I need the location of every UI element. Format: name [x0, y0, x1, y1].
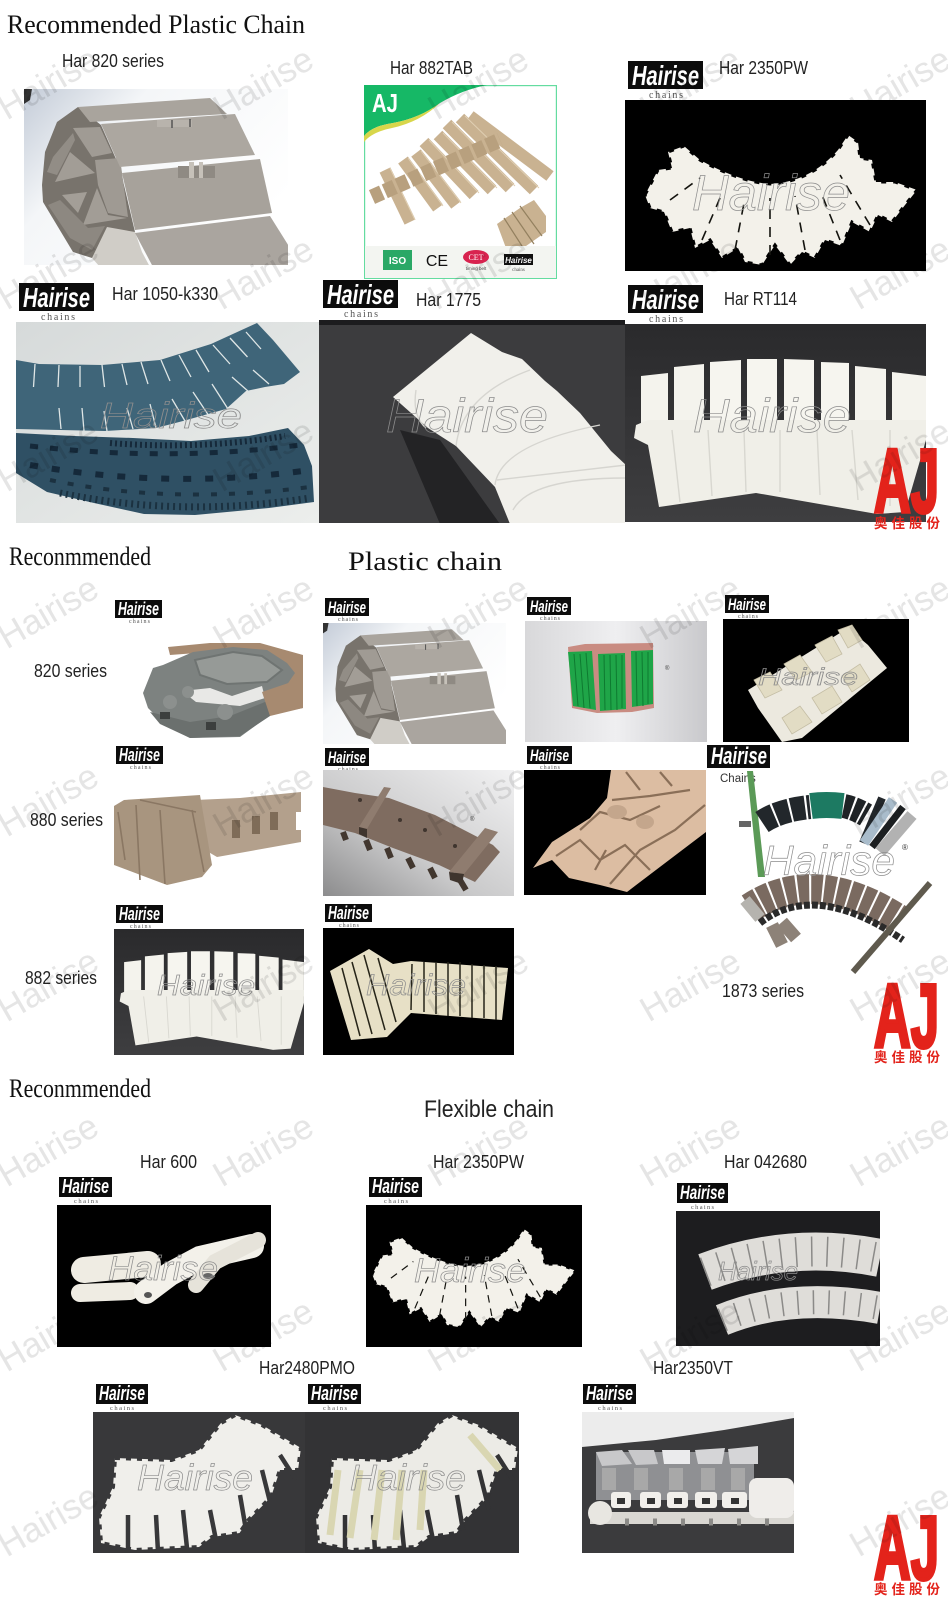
photo: 820 series plates	[323, 623, 506, 744]
product label: Har 1775: Har 1775	[416, 290, 481, 310]
photo: 1873 series chains	[739, 771, 930, 972]
logo: Hairise: chains	[649, 90, 683, 101]
photo: 882 series white chain: Hairise	[157, 970, 255, 1002]
logo: Hairise	[325, 748, 369, 773]
logo: AJ company mark: 奥佳股份	[874, 512, 940, 532]
photo: 880 series chain	[114, 792, 301, 885]
logo: Hairise	[677, 1183, 728, 1211]
photo: Har 042680: Hairise	[718, 1256, 798, 1286]
logo: Hairise: Hairise	[530, 746, 569, 765]
photo: Har RT114: Hairise	[693, 389, 851, 442]
product label: Har 820 series: Har 820 series	[62, 51, 164, 71]
logo: Hairise: chains	[41, 312, 75, 323]
logo: Hairise: chains	[323, 1405, 347, 1412]
background watermark pattern: Hairise	[206, 39, 320, 128]
logo: Hairise: Hairise	[328, 903, 369, 923]
background watermark pattern: Hairise	[633, 941, 747, 1030]
row label: 882 series: 882 series	[25, 968, 97, 988]
logo: Hairise	[325, 598, 369, 623]
background watermark pattern: Hairise	[633, 568, 747, 657]
photo: Har 2350PW	[625, 100, 926, 271]
row label: 880 series: 880 series	[30, 810, 103, 830]
product label: Har 882TAB: Har 882TAB	[390, 58, 473, 78]
logo: Hairise	[628, 284, 703, 325]
photo: Har 2350PW: Hairise	[414, 1252, 526, 1290]
background watermark pattern: Hairise	[633, 1291, 747, 1380]
logo: Hairise: Hairise	[328, 748, 366, 767]
logo: Hairise: chains	[540, 765, 561, 771]
logo: Hairise	[116, 904, 163, 930]
section heading: Flexible chain: Flexible chain	[424, 1096, 554, 1123]
logo: Hairise: chains	[738, 614, 759, 620]
logo: Hairise	[725, 595, 769, 620]
photo: Har 600	[57, 1205, 271, 1347]
logo: Hairise	[308, 1383, 361, 1412]
logo: Hairise: Hairise	[119, 904, 160, 924]
logo: Hairise: chains	[338, 617, 359, 623]
logo: Hairise: Hairise	[680, 1183, 725, 1204]
logo: Hairise: Hairise	[632, 60, 699, 91]
photo: Har 882TAB catalogue card: ISO	[389, 256, 406, 267]
product label: Har2480PMO: Har2480PMO	[259, 1358, 355, 1378]
logo: Hairise	[323, 279, 398, 320]
logo: Hairise: chains	[338, 767, 359, 773]
logo: Hairise: chains	[339, 923, 360, 929]
product label: Har 2350PW: Har 2350PW	[433, 1152, 524, 1172]
logo: Hairise: Hairise	[62, 1176, 109, 1198]
product label: Har2350VT: Har2350VT	[653, 1358, 733, 1378]
photo: Har 820 series	[24, 89, 288, 265]
photo: 820 series white cleat chain	[723, 619, 909, 742]
photo: Har 600: Hairise	[108, 1250, 218, 1288]
photo: Har2480PMO pair: Hairise	[137, 1457, 253, 1498]
photo: Har 2350PW	[366, 1205, 582, 1347]
photo: Har 1775: Hairise	[386, 389, 548, 442]
photo: 880 series tan chain	[524, 770, 706, 895]
logo: Hairise: chains	[130, 765, 152, 771]
logo: Hairise	[527, 746, 572, 771]
logo: Hairise	[96, 1383, 148, 1412]
photo: Har 1050-k330	[16, 322, 319, 523]
logo: Hairise	[325, 903, 372, 929]
row label: 1873 series: 1873 series	[722, 981, 804, 1001]
photo: Har2480PMO pair: Hairise	[350, 1457, 466, 1498]
background watermark pattern: Hairise	[206, 756, 320, 845]
logo: Hairise: chains	[74, 1198, 98, 1205]
logo: Hairise: chains	[110, 1405, 134, 1412]
background watermark pattern: Hairise	[421, 1291, 535, 1380]
photo: 880 series chain with cleats	[323, 770, 514, 896]
photo: Har 1050-k330: Hairise	[100, 395, 242, 436]
logo: Hairise	[628, 60, 703, 101]
photo: Har 882TAB catalogue card: chains	[512, 268, 525, 273]
logo: Hairise with Chains caption	[707, 743, 770, 785]
logo: Hairise: chains	[598, 1405, 622, 1412]
background watermark pattern: Hairise	[206, 229, 320, 318]
photo: 820 series green rubber top	[525, 621, 707, 742]
product label: Har 2350PW: Har 2350PW	[719, 58, 808, 78]
photo: 882 series cream chain	[323, 928, 514, 1055]
logo: AJ company mark: AJ	[874, 967, 939, 1067]
photo: 882 series cream chain: Hairise	[366, 969, 466, 1002]
logo: Hairise	[369, 1176, 422, 1205]
section heading: Reconmmended: Reconmmended	[9, 542, 151, 571]
title: Recommended Plastic Chain	[7, 10, 305, 39]
photo: 820 series green rubber top: ®	[665, 665, 670, 672]
logo: Hairise: chains	[130, 924, 152, 930]
photo: Har 882TAB catalogue card: Hairise	[505, 256, 532, 265]
logo: Hairise: Hairise	[728, 595, 766, 614]
background watermark pattern: Hairise	[206, 568, 320, 657]
photo: 820 series white cleat chain: Hairise	[758, 664, 858, 691]
logo: Hairise: Hairise	[311, 1383, 358, 1405]
logo: Hairise: chains	[344, 309, 378, 320]
photo: Har2480PMO pair	[93, 1412, 519, 1553]
photo: Har 882TAB catalogue card: timing belt	[466, 266, 487, 271]
logo: Hairise: chains	[384, 1198, 408, 1205]
photo: Har 882TAB catalogue card	[364, 85, 557, 279]
logo: Hairise: Hairise	[530, 597, 568, 616]
logo: Hairise: chains	[129, 619, 151, 625]
background watermark pattern: Hairise	[421, 568, 535, 657]
photo: 1873 series chains: ®	[902, 843, 908, 852]
background watermark pattern: Hairise	[421, 39, 535, 128]
background watermark pattern: Hairise	[633, 229, 747, 318]
logo: Hairise: chains	[649, 314, 683, 325]
product label: Har 042680: Har 042680	[724, 1152, 807, 1172]
logo: Hairise	[19, 282, 94, 323]
photo: 820 series sprocket chain	[143, 643, 303, 738]
photo: 1873 series chains: Hairise	[763, 837, 895, 884]
logo: Hairise: Hairise	[119, 745, 160, 765]
row label: 820 series: 820 series	[34, 661, 107, 681]
product label: Har 1050-k330: Har 1050-k330	[112, 284, 218, 304]
logo: AJ company mark: 奥佳股份	[874, 1046, 940, 1066]
photo: Har 1775	[319, 320, 625, 523]
photo: Har 882TAB catalogue card: AJ	[372, 88, 398, 118]
photo: Har2350VT	[582, 1412, 794, 1553]
product label: Har 600: Har 600	[140, 1152, 197, 1172]
background watermark pattern: Hairise	[633, 1106, 747, 1195]
background watermark pattern: Hairise	[206, 411, 320, 500]
logo: Hairise: Hairise	[118, 599, 159, 619]
logo: Hairise	[527, 597, 571, 622]
photo: Har 882TAB catalogue card: CE	[426, 253, 448, 270]
background watermark pattern: Hairise	[421, 229, 535, 318]
logo: AJ company mark: AJ	[874, 432, 939, 532]
logo: Hairise	[115, 599, 162, 625]
background watermark pattern: Hairise	[206, 1106, 320, 1195]
background watermark pattern: Hairise	[421, 756, 535, 845]
photo: Har 2350PW: Hairise	[692, 165, 850, 221]
background watermark pattern: Hairise	[633, 39, 747, 128]
logo: Hairise: chains	[691, 1204, 714, 1211]
logo: Hairise: Hairise	[328, 598, 366, 617]
background watermark pattern: Hairise	[206, 1291, 320, 1380]
logo: Hairise: chains	[540, 616, 561, 622]
logo: Hairise	[116, 745, 163, 771]
photo: 882 series white chain	[114, 929, 304, 1055]
product label: Har RT114: Har RT114	[724, 289, 797, 309]
photo: Har 042680	[676, 1211, 880, 1346]
logo: Hairise	[583, 1383, 636, 1412]
logo: Hairise with Chains caption: Hairise	[711, 743, 767, 770]
logo: Hairise	[59, 1176, 112, 1205]
section heading: Plastic chain: Plastic chain	[348, 547, 502, 576]
photo: Har RT114	[625, 324, 926, 522]
logo: Hairise: Hairise	[632, 284, 699, 315]
background watermark pattern: Hairise	[421, 1106, 535, 1195]
photo: 880 series chain with cleats: ®	[470, 816, 475, 823]
logo: AJ company mark: 奥佳股份	[874, 1578, 940, 1598]
logo: Hairise: Hairise	[99, 1383, 145, 1405]
photo: Har 882TAB catalogue card: CET	[468, 253, 484, 262]
logo: Hairise: Hairise	[23, 282, 90, 313]
logo: Hairise: Hairise	[372, 1176, 419, 1198]
background watermark pattern: Hairise	[421, 941, 535, 1030]
logo: Hairise with Chains caption: Chains	[720, 773, 756, 785]
section heading: Reconmmended: Reconmmended	[9, 1074, 151, 1103]
logo: Hairise: Hairise	[586, 1383, 633, 1405]
background watermark pattern: Hairise	[206, 941, 320, 1030]
logo: Hairise: Hairise	[327, 279, 394, 310]
logo: AJ company mark: AJ	[874, 1499, 939, 1599]
